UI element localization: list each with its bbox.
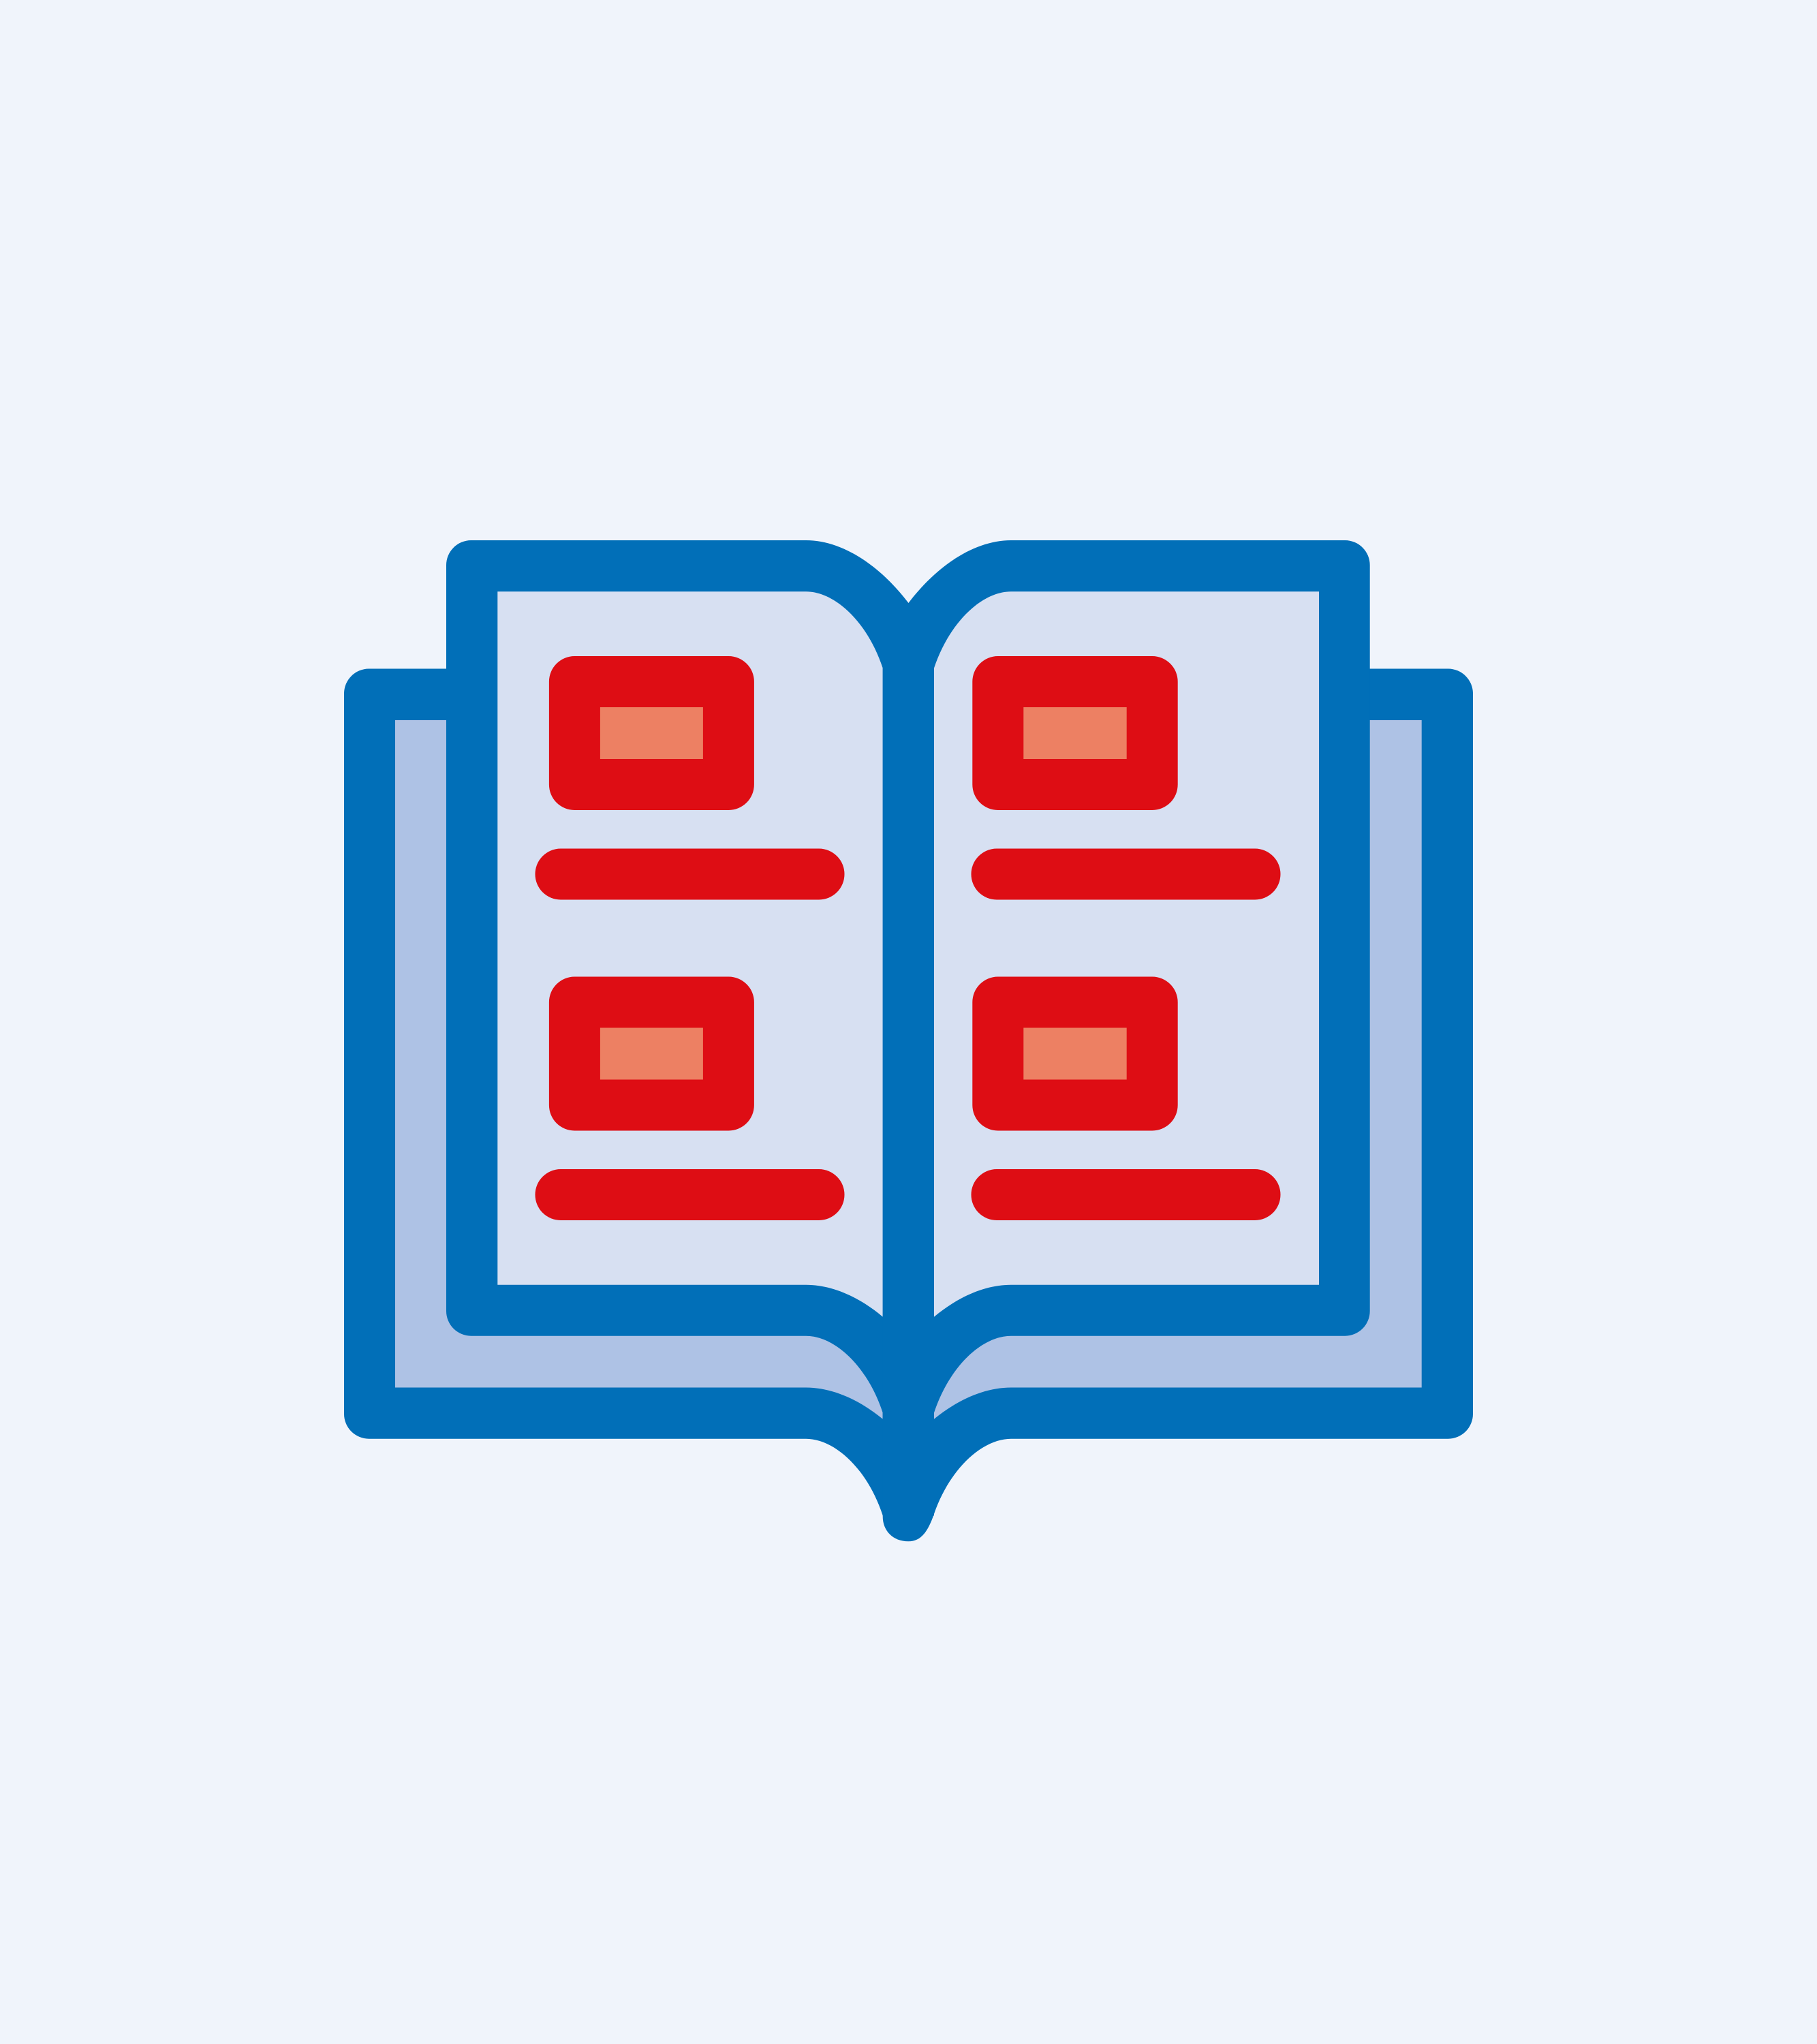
left page: bottom text line — [561, 1169, 819, 1220]
left page: top image box — [574, 681, 728, 785]
page block silhouette — [446, 540, 1370, 1431]
back cover right inner sheet — [934, 720, 1422, 1419]
right page: top image box — [998, 681, 1152, 785]
back cover silhouette — [344, 669, 1473, 1541]
book spine — [883, 668, 934, 1515]
right page: bottom text line — [997, 1169, 1255, 1220]
left page: top text line — [561, 849, 819, 899]
right page: bottom image box — [998, 1002, 1152, 1105]
back cover left inner sheet — [395, 720, 883, 1419]
icon: open book — [344, 540, 1473, 1541]
left page — [497, 591, 883, 1317]
left page: bottom image box — [574, 1002, 728, 1105]
right page — [934, 591, 1319, 1317]
right page: top text line — [997, 849, 1255, 899]
